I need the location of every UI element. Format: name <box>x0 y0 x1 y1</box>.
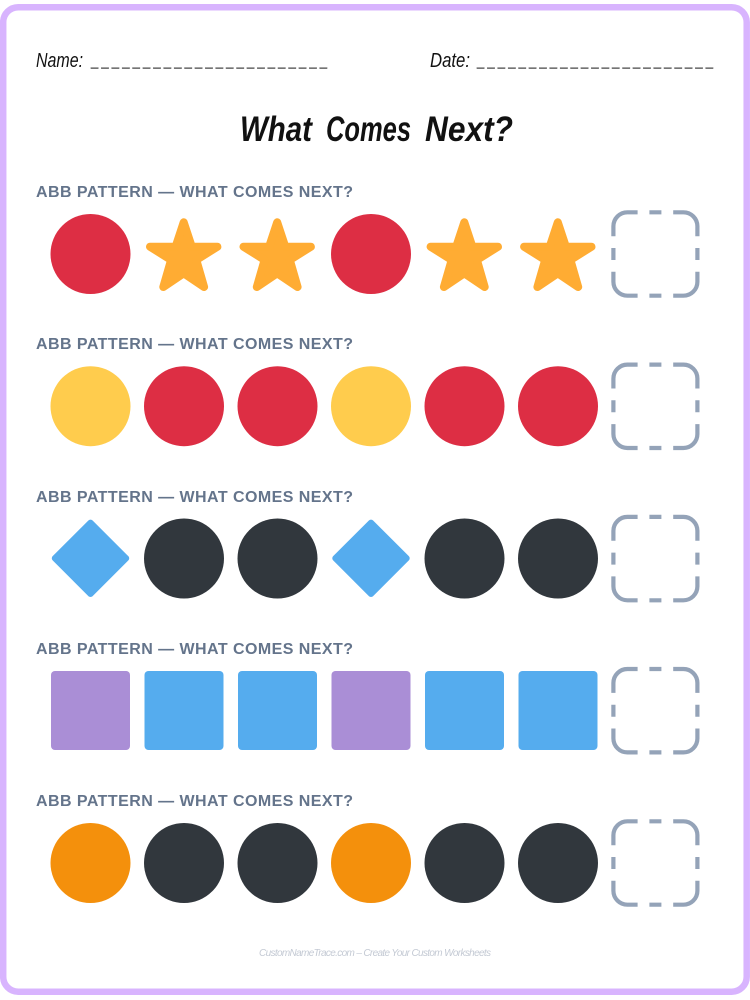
row 2: yellow and red circle pattern <box>36 336 697 448</box>
row 5 shapes <box>50 823 598 903</box>
date field: _______________________ <box>476 54 714 69</box>
name field: _______________________ <box>90 54 328 69</box>
row 2 label: ABB PATTERN — WHAT COMES NEXT? <box>36 336 353 353</box>
row 3 answer box <box>613 517 697 600</box>
footer credit: CustomNameTrace.com – Create Your Custom Worksheets <box>259 948 491 959</box>
row 4 answer box <box>613 669 697 752</box>
row 3 label: ABB PATTERN — WHAT COMES NEXT? <box>36 489 353 506</box>
title: Comes <box>326 110 411 149</box>
title: Next? <box>425 110 513 149</box>
row 1: red circle and orange star pattern <box>36 184 697 296</box>
date field <box>430 50 714 72</box>
row 5: orange and black circle pattern <box>36 793 697 905</box>
row 1 label: ABB PATTERN — WHAT COMES NEXT? <box>36 184 353 201</box>
row 4 label: ABB PATTERN — WHAT COMES NEXT? <box>36 641 353 658</box>
row 1 answer box <box>613 212 697 296</box>
row 3: blue diamond and black circle pattern <box>36 489 697 600</box>
row 4: purple and blue square pattern <box>36 641 697 752</box>
row 2 answer box <box>613 365 697 448</box>
row 3 shapes <box>51 518 598 598</box>
row 2 shapes <box>50 366 598 446</box>
name field: Name: <box>36 50 83 72</box>
row 4 shapes <box>51 671 598 750</box>
date field: Date: <box>430 50 470 72</box>
row 5 answer box <box>613 821 697 905</box>
title: What <box>240 110 313 149</box>
row 5 label: ABB PATTERN — WHAT COMES NEXT? <box>36 793 353 810</box>
row 1 shapes <box>50 214 592 294</box>
name field <box>36 50 328 72</box>
